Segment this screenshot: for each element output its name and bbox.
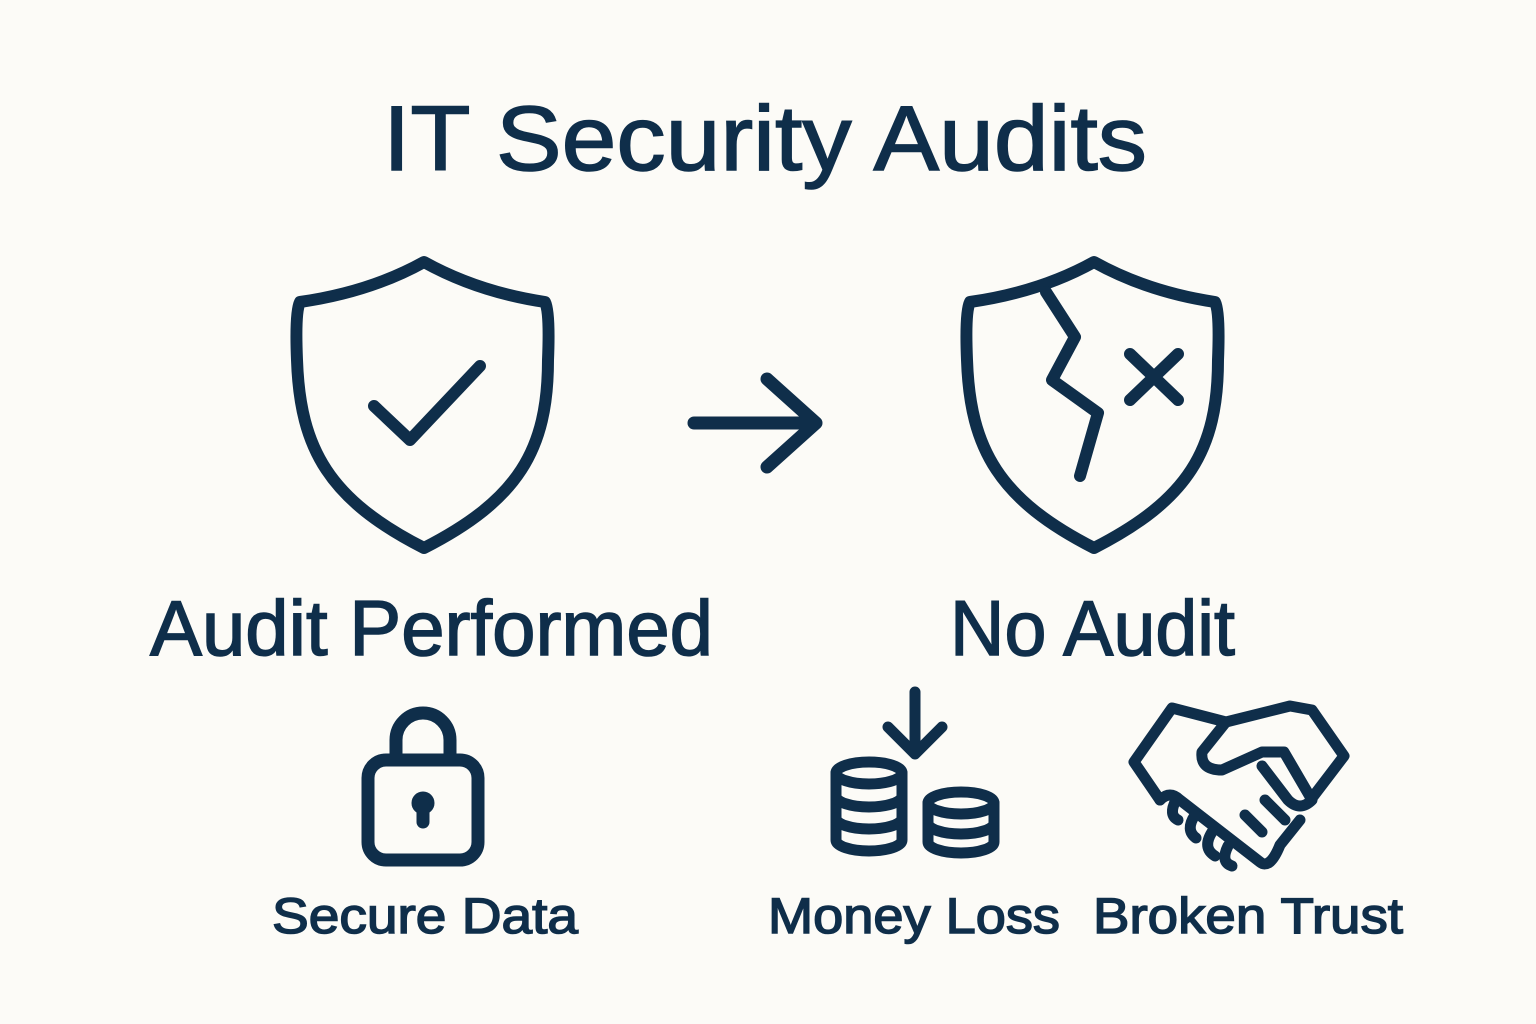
- title: IT Security Audits: [383, 88, 1147, 190]
- label: Audit Performed: Audit Performed: [150, 584, 713, 672]
- icon: shield with check: [296, 262, 549, 548]
- label: Broken Trust: Broken Trust: [1093, 888, 1403, 944]
- label: Money Loss: Money Loss: [768, 888, 1060, 944]
- label: No Audit: No Audit: [950, 584, 1235, 672]
- icon: broken handshake: [1134, 706, 1344, 866]
- arrow: [694, 379, 816, 467]
- icon: coins with down arrow: [836, 692, 994, 853]
- icon: broken shield with x: [966, 262, 1219, 548]
- icon: lock: [368, 713, 478, 860]
- label: Secure Data: Secure Data: [272, 888, 578, 944]
